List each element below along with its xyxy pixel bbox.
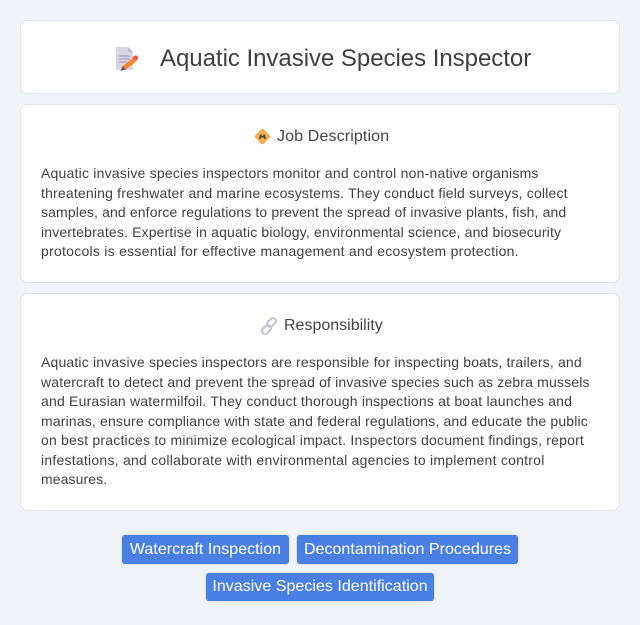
heading: responsibility: Responsibility xyxy=(284,317,383,334)
tag: watercraft inspection xyxy=(122,535,289,564)
panel: responsibility xyxy=(20,293,620,511)
text block: responsibility: Aquatic invasive species inspectors are responsible for inspecting boats, trailers, and xyxy=(41,354,582,370)
tag: invasive species identification: Invasive Species Identification xyxy=(212,578,428,595)
text block: responsibility: and Eurasian watermilfoil. They conduct thorough inspections at boat launches and xyxy=(41,393,572,409)
text block: responsibility: marinas, ensure compliance with state and federal regulations, and educate the public xyxy=(41,413,588,429)
text block: responsibility: on best practices to minimize ecological impact. Inspectors document findings, report xyxy=(41,432,584,448)
icon: chain link xyxy=(261,317,277,335)
panel: job description xyxy=(20,104,620,283)
heading: job description: Job Description xyxy=(277,128,389,145)
text block: job description: samples, and enforce regulations to prevent the spread of invasive plants, fish, and xyxy=(41,204,566,220)
tag: watercraft inspection: Watercraft Inspection xyxy=(130,541,281,558)
text block: responsibility: measures. xyxy=(41,471,107,487)
panel: title xyxy=(20,20,620,94)
tag: decontamination procedures xyxy=(297,535,518,564)
text block: job description: Aquatic invasive species inspectors monitor and control non-native organisms xyxy=(41,165,539,181)
icon: diamond sign xyxy=(254,128,270,144)
text block: job description: protocols is essential for effective management and ecosystem protection. xyxy=(41,243,519,259)
text block: responsibility xyxy=(41,354,590,487)
text block: responsibility: watercraft to detect and prevent the spread of invasive species such as zebra mussels xyxy=(41,374,590,390)
tag: decontamination procedures: Decontamination Procedures xyxy=(304,541,511,558)
icon: document with pencil xyxy=(116,47,138,71)
tag: invasive species identification xyxy=(206,573,434,601)
text block: responsibility: infestations, and collaborate with environmental agencies to implement control xyxy=(41,452,545,468)
text block: job description: invertebrates. Expertise in aquatic biology, environmental science, and biosecurity xyxy=(41,224,561,240)
title text: Aquatic Invasive Species Inspector xyxy=(160,45,531,72)
text block: job description xyxy=(41,165,568,259)
text block: job description: threatening freshwater and marine ecosystems. They conduct field surveys, collect xyxy=(41,185,568,201)
